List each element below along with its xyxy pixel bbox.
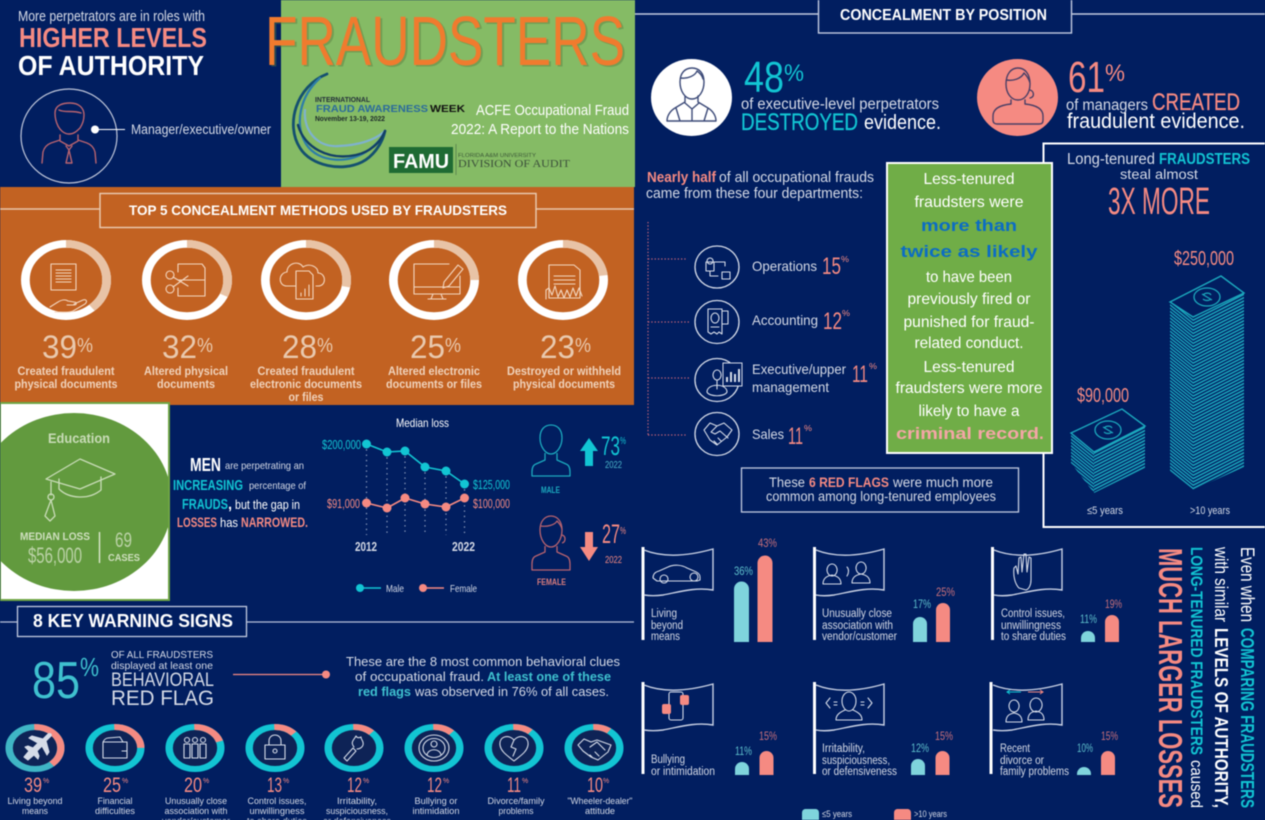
donut: 28% created electronic documents: or files — [288, 392, 324, 404]
chart: large money stack: $250,000 — [1174, 248, 1234, 270]
text block: men are perpetrating: has — [220, 516, 238, 530]
red flag: recent divorce: family problems — [1000, 766, 1069, 778]
heading: top 5 concealment methods — [0, 194, 634, 228]
text: 8 most common behavioral clues: At least one of these — [487, 669, 611, 684]
warning sign: irritability 12%: suspiciousness, — [326, 806, 388, 817]
callout: less-tenured fraudsters: to have been — [926, 269, 1012, 286]
warning sign: close association 20%: Unusually close — [165, 796, 227, 807]
donut: 39% created physical documents: % — [77, 335, 93, 357]
text: nearly half of all occupational frauds: of all occupational frauds — [719, 170, 874, 186]
department: operations 15%: 15 — [822, 253, 841, 280]
panel: education — [0, 403, 172, 600]
chart legend — [356, 583, 477, 595]
warning sign: irritability 12% — [323, 727, 391, 820]
department: operations 15% — [695, 246, 849, 288]
stat: 61% managers: fraudulent evidence. — [1067, 110, 1245, 133]
department: sales 11%: % — [804, 424, 812, 433]
text block: men are perpetrating: NARROWED. — [241, 514, 308, 530]
red flag: control issues — [992, 547, 1122, 643]
warning sign: divorce or family problems 11%: Divorce/family — [488, 796, 545, 807]
donut: 28% created electronic documents: electronic documents — [250, 379, 362, 391]
callout: less-tenured fraudsters: fraudsters were more — [896, 380, 1043, 397]
icon: manager person in circle — [21, 89, 117, 183]
vertical text: comparing fraudsters — [1152, 546, 1257, 808]
text: nearly half of all occupational frauds: Nearly half — [647, 170, 716, 186]
stat: 48% executive-level: 48 — [744, 53, 784, 102]
bars: 17% vs 25%: 17% — [913, 597, 931, 611]
connector — [233, 670, 330, 678]
stat: 48% executive-level: evidence. — [864, 112, 941, 134]
icon: car — [653, 565, 700, 581]
red flag: irritability: Irritability, — [822, 743, 865, 755]
donut: 39% created physical documents: physical documents — [14, 379, 118, 391]
text: 8 most common behavioral clues: red flags — [358, 684, 411, 699]
stat: female 27%: 2022 — [605, 555, 622, 566]
diagram: departments — [648, 222, 877, 456]
text: 8 most common behavioral clues: of occupational fraud. — [355, 669, 484, 684]
text block: men are perpetrating: INCREASING — [173, 478, 243, 494]
bars: 11% vs 19%: 11% — [1080, 612, 1097, 626]
callout: less-tenured fraudsters: criminal record — [896, 424, 1039, 443]
logo: famu division of audit: FAMU — [393, 151, 449, 173]
text: nearly half of all occupational frauds: came from these four departments: — [646, 186, 863, 202]
department: sales 11% — [695, 412, 812, 456]
callout: less-tenured fraudsters: twice as likely — [900, 242, 1038, 261]
stat: median loss: $56,000 — [28, 543, 82, 568]
logo: fraud awareness week swoosh — [293, 74, 385, 167]
text block: men are perpetrating: FRAUDS — [182, 497, 228, 513]
warning sign: wheeler-dealer 10%: % — [603, 778, 609, 785]
red flag: unusually close association: Unusually close — [822, 608, 892, 620]
chart value labels: $100,000 — [473, 496, 510, 511]
red flag: irritability — [814, 682, 953, 778]
text: more perpetrators intro: More perpetrators are in roles with — [18, 8, 205, 25]
text: 8 most common behavioral clues: These are the 8 most common behavioral clues — [346, 654, 620, 669]
red flag: unusually close association: association with — [822, 620, 893, 632]
red flag: recent divorce — [991, 682, 1118, 778]
warning sign: bullying 12%: % — [443, 778, 449, 785]
warning sign: living beyond means 39%: 39 — [24, 774, 42, 797]
warning sign: financial difficulties 25%: % — [122, 778, 128, 785]
warning sign: close association 20%: % — [203, 778, 209, 785]
panel: long-tenured fraudsters steal 3x more: steal almost — [1120, 166, 1198, 182]
bars: 12% vs 15% — [911, 729, 953, 775]
donut: 25% altered electronic documents: % — [445, 335, 461, 357]
callout: less-tenured fraudsters: related conduct. — [914, 335, 1024, 352]
warning sign: financial difficulties 25% — [89, 727, 141, 817]
text: nearly half of all occupational frauds — [646, 170, 874, 202]
warning sign: irritability 12%: 12 — [347, 774, 362, 797]
department: operations 15%: % — [841, 255, 849, 264]
heading: 8 key warning signs — [0, 606, 634, 636]
logo: famu division of audit: FLORIDA A&M UNIVERSITY — [458, 153, 537, 159]
stat: male 73% — [532, 425, 626, 495]
department: operations 15%: Operations — [752, 258, 817, 274]
warning sign: divorce or family problems 11% — [488, 727, 545, 817]
department: accounting 12%: 12 — [823, 308, 842, 335]
chart value labels: $125,000 — [473, 477, 510, 492]
icon: graduation cap — [45, 459, 115, 521]
text: acfe report: ACFE Occupational Fraud — [476, 102, 629, 119]
icon: executive — [651, 59, 732, 136]
red flag: unusually close association — [814, 547, 955, 643]
title: FRAUDSTERS — [265, 2, 625, 80]
heading: 8 key warning signs: 8 KEY WARNING SIGNS — [33, 611, 233, 631]
text block: men are perpetrating: percentage of — [249, 480, 306, 492]
icon: phone with message bubbles — [662, 692, 689, 720]
bars: 11% vs 19% — [1080, 597, 1122, 642]
warning sign: irritability 12%: Irritability, — [337, 796, 377, 807]
legend: tenure — [802, 809, 947, 820]
warning sign: living beyond means 39%: % — [43, 778, 49, 785]
warning sign: bullying 12%: 12 — [427, 774, 442, 797]
warning sign: wheeler-dealer 10%: attitude — [585, 806, 615, 817]
stat: 85% behavioral red flag: displayed at least one — [111, 660, 213, 672]
stat: 48% executive-level: % — [784, 60, 804, 87]
warning sign: control issues 13%: 13 — [267, 774, 282, 797]
callout: 6 red flags: common among long-tenured employees — [766, 488, 996, 504]
bars: 11% vs 15% — [735, 729, 777, 775]
bars: 10% vs 15%: 10% — [1077, 741, 1093, 755]
donut: 23% destroyed or withheld: Destroyed or withheld — [507, 366, 621, 378]
stat: male 73%: 73 — [601, 431, 620, 461]
stat: 61% managers: CREATED — [1152, 89, 1240, 116]
stat: 85% behavioral red flag: RED FLAG — [111, 687, 214, 710]
icon: irritated person — [826, 692, 872, 720]
logo text: fraud awareness week: FRAUD AWARENESS — [316, 103, 428, 115]
stat: 85% behavioral red flag: % — [80, 652, 99, 682]
callout: less-tenured fraudsters: fraudsters were — [914, 194, 1024, 211]
donut: 32% altered physical documents: Altered physical — [144, 366, 228, 378]
callout: 6 red flags: These — [769, 474, 805, 490]
panel: title and logos — [265, 0, 635, 187]
warning sign: close association 20%: 20 — [184, 774, 202, 797]
stat: 85% behavioral red flag: BEHAVIORAL — [111, 670, 214, 691]
donut: 32% altered physical documents: 32 — [162, 329, 197, 365]
bars: 17% vs 25% — [913, 585, 955, 642]
red flag: unusually close association: vendor/customer — [822, 631, 897, 643]
icon: separated couple — [1006, 690, 1044, 722]
donut: 25% altered electronic documents: Altered electronic — [388, 366, 481, 378]
department: executive/upper management 11%: Executive/upper — [752, 361, 846, 377]
red flag: bullying or intimidation: or intimidation — [651, 766, 715, 778]
text: acfe report — [451, 102, 629, 138]
stat: female 27%: % — [620, 526, 626, 537]
callout: less-tenured fraudsters: previously fired or — [908, 291, 1031, 308]
stat: 85% behavioral red flag: 85 — [32, 652, 80, 710]
donut: 28% created electronic documents — [250, 244, 362, 404]
warning sign: bullying 12% — [408, 727, 460, 817]
stat: female 27%: FEMALE — [537, 577, 566, 587]
callout: manager/executive/owner: Manager/executive/owner — [131, 122, 271, 137]
panel: long-tenured fraudsters steal 3x more: Long-tenured — [1067, 151, 1155, 168]
chart value labels: $200,000 — [322, 437, 361, 452]
chart value labels: 2022 — [452, 540, 475, 554]
chart value labels: 2012 — [355, 540, 377, 554]
bars: 36% vs 43%: 43% — [758, 536, 777, 550]
red flag: irritability: suspiciousness, — [822, 755, 890, 767]
series: male — [362, 440, 469, 488]
stat: 48% executive-level: of executive-level perpetrators — [741, 96, 939, 113]
red flag: bullying or intimidation: Bullying — [651, 754, 685, 766]
text: acfe report: 2022: A Report to the Nations — [451, 121, 629, 138]
stat: 85% behavioral red flag — [32, 649, 214, 710]
donut: 23% destroyed or withheld: 23 — [540, 329, 575, 365]
donut: 32% altered physical documents: % — [197, 335, 213, 357]
stat: median loss: MEDIAN LOSS — [20, 531, 90, 543]
stat: 61% managers: % — [1105, 60, 1125, 87]
callout: 6 red flags: 6 RED FLAGS — [809, 474, 889, 490]
warning sign: living beyond means 39%: Living beyond — [8, 796, 62, 807]
panel: top 5 concealment methods — [0, 187, 634, 405]
warning sign: financial difficulties 25%: difficulties — [95, 806, 135, 817]
stat: 69 cases — [108, 529, 140, 564]
warning sign: divorce or family problems 11%: 11 — [507, 774, 521, 797]
warning sign: bullying 12%: intimidation — [412, 806, 460, 817]
warning sign: living beyond means 39% — [8, 727, 62, 817]
callout: less-tenured fraudsters: likely to have a — [918, 403, 1020, 420]
heading: top 5 concealment methods: TOP 5 CONCEALMENT METHODS USED BY FRAUDSTERS — [129, 202, 507, 218]
heading: of authority: OF AUTHORITY — [18, 50, 204, 81]
text block: men are perpetrating: LOSSES — [177, 514, 217, 530]
callout: less-tenured fraudsters: Less-tenured — [924, 359, 1014, 376]
red flag: living beyond means — [643, 536, 777, 643]
bars: 36% vs 43%: 36% — [734, 564, 753, 578]
stat: 69 cases: 69 — [115, 529, 132, 552]
logo: famu division of audit — [389, 144, 570, 175]
stat: 85% behavioral red flag: OF ALL FRAUDSTERS — [111, 649, 213, 661]
bars: 36% vs 43% — [734, 536, 777, 642]
red flag: recent divorce: divorce or — [1000, 755, 1044, 767]
callout: 6 red flags — [742, 468, 1018, 512]
icon: two people talking — [823, 562, 870, 584]
donut: 23% destroyed or withheld: physical documents — [513, 379, 615, 391]
text block: men are perpetrating: , — [228, 497, 232, 513]
text block: men are perpetrating: are perpetrating an — [225, 460, 304, 472]
vertical text: comparing fraudsters: caused — [1187, 760, 1206, 808]
donut: 25% altered electronic documents: documents or files — [386, 379, 482, 391]
donut: 23% destroyed or withheld: % — [575, 335, 591, 357]
donut: 39% created physical documents: Created fraudulent — [18, 366, 115, 378]
text: 8 most common behavioral clues: was observed in 76% of all cases. — [414, 684, 609, 699]
warning sign: financial difficulties 25%: 25 — [103, 774, 121, 797]
donut: 32% altered physical documents — [144, 244, 228, 391]
logo: famu division of audit: DIVISION OF AUDIT — [458, 158, 570, 170]
warning sign: close association 20% — [162, 727, 230, 820]
series: female — [362, 494, 469, 512]
legend: tenure: ≤5 years — [822, 809, 852, 820]
donut: 28% created electronic documents: 28 — [282, 329, 317, 365]
stat: female 27% — [532, 516, 626, 587]
logo text: fraud awareness week: INTERNATIONAL — [315, 97, 371, 104]
warning sign: financial difficulties 25%: Financial — [98, 796, 132, 807]
donut: 23% destroyed or withheld — [507, 244, 621, 391]
red flag: living beyond means: beyond — [651, 620, 683, 632]
callout: less-tenured fraudsters: punished for fraud- — [904, 314, 1034, 331]
bars: 11% vs 15%: 15% — [759, 729, 777, 743]
department: executive/upper management 11%: 11 — [852, 361, 868, 388]
donut: 39% created physical documents: 39 — [42, 329, 77, 365]
warning sign: control issues 13%: unwillingness — [250, 806, 305, 817]
logo text: fraud awareness week — [315, 97, 465, 123]
stat: male 73%: % — [620, 436, 626, 447]
icon: raised hand — [1014, 554, 1031, 590]
callout: less-tenured fraudsters: . — [1039, 424, 1044, 443]
warning sign: control issues 13%: Control issues, — [248, 796, 306, 807]
department: sales 11%: 11 — [788, 423, 803, 450]
warning sign: bullying 12%: Bullying or — [414, 796, 458, 807]
red flag: control issues: unwillingness — [1001, 620, 1061, 632]
stat: 48% executive-level — [651, 53, 941, 136]
callout: less-tenured fraudsters: Less-tenured — [924, 171, 1014, 188]
stat: female 27%: 27 — [602, 519, 620, 549]
bars: 12% vs 15%: 12% — [911, 741, 929, 755]
warning sign: wheeler-dealer 10%: "Wheeler-dealer" — [568, 796, 632, 807]
bars: 10% vs 15% — [1077, 729, 1118, 775]
text block: men are perpetrating: but the gap in — [235, 498, 300, 512]
panel: long-tenured fraudsters steal 3x more — [1044, 144, 1265, 527]
bars: 12% vs 15%: 15% — [935, 729, 953, 743]
chart: small money stack — [1071, 385, 1145, 517]
stat: 61% managers: of managers — [1066, 97, 1148, 114]
bars: 11% vs 15%: 11% — [735, 744, 752, 758]
chart legend: Female — [450, 583, 477, 595]
chart value labels: $91,000 — [327, 496, 360, 511]
stat: median loss — [20, 531, 90, 568]
stat: male 73%: 2022 — [605, 460, 622, 471]
callout: less-tenured fraudsters — [887, 163, 1052, 453]
donut: 25% altered electronic documents — [386, 244, 482, 391]
heading: concealment by position: CONCEALMENT BY POSITION — [840, 7, 1047, 24]
chart value labels — [322, 437, 510, 554]
red flag: control issues: to share duties — [1001, 631, 1066, 643]
text: 8 most common behavioral clues — [346, 654, 620, 699]
red flag: irritability: or defensiveness — [822, 766, 897, 778]
warning sign: wheeler-dealer 10%: 10 — [587, 774, 603, 797]
red flag: control issues: Control issues, — [1001, 608, 1065, 620]
icon: manager — [977, 59, 1058, 136]
text block: men are perpetrating — [173, 455, 308, 530]
warning sign: irritability 12%: % — [363, 778, 369, 785]
department: executive/upper management 11% — [695, 358, 877, 402]
department: accounting 12%: % — [842, 309, 850, 318]
bars: 10% vs 15%: 15% — [1101, 729, 1118, 743]
text block: men are perpetrating: MEN — [190, 455, 221, 475]
title: FRAUDSTERS — [267, 4, 627, 82]
logo text: fraud awareness week: WEEK — [430, 103, 465, 115]
logo text: fraud awareness week: November 13-19, 2022 — [315, 116, 385, 123]
bars: 17% vs 25%: 25% — [936, 585, 955, 599]
callout: less-tenured fraudsters: more than — [921, 216, 1017, 235]
donut: 28% created electronic documents: % — [317, 335, 333, 357]
bars: 11% vs 19%: 19% — [1105, 597, 1122, 611]
vertical text: comparing fraudsters: Even when — [1236, 547, 1257, 622]
stat: male 73%: MALE — [541, 485, 560, 495]
red flag: living beyond means: Living — [651, 608, 677, 620]
donut: 28% created electronic documents: Created fraudulent — [258, 366, 355, 378]
stat: 61% managers — [977, 53, 1245, 136]
department: executive/upper management 11%: management — [752, 379, 829, 395]
line chart: median loss — [322, 416, 510, 595]
department: accounting 12%: Accounting — [752, 312, 818, 328]
warning sign: divorce or family problems 11%: % — [522, 778, 528, 785]
callout: 6 red flags: were much more — [892, 474, 993, 490]
vertical text: comparing fraudsters: LONG-TENURED FRAUDSTERS — [1187, 547, 1206, 755]
chart legend: Male — [386, 583, 404, 595]
donut: 25% altered electronic documents: 25 — [410, 329, 445, 365]
panel: higher levels of authority — [0, 0, 281, 187]
stat: 61% managers: 61 — [1068, 53, 1105, 102]
stat: 69 cases: CASES — [108, 553, 140, 564]
chart: large money stack: >10 years — [1190, 505, 1230, 517]
red flag: recent divorce: Recent — [1000, 743, 1031, 755]
label: education: Education — [48, 430, 110, 446]
warning sign: control issues 13%: % — [283, 778, 289, 785]
warning sign: close association 20%: association with — [164, 806, 228, 817]
legend: tenure: >10 years — [914, 809, 947, 820]
warning sign: control issues 13% — [247, 727, 307, 820]
donut: 32% altered physical documents: documents — [157, 379, 215, 391]
chart: small money stack: $90,000 — [1077, 385, 1129, 407]
stat: 48% executive-level: DESTROYED — [741, 109, 858, 136]
chart title: Median loss — [396, 416, 449, 430]
vertical text: comparing fraudsters: with similar — [1211, 546, 1231, 622]
panel: long-tenured fraudsters steal 3x more: FRAUDSTERS — [1159, 151, 1250, 168]
heading: concealment by position — [635, 0, 1265, 33]
department: accounting 12% — [695, 300, 850, 344]
red flag: bullying or intimidation — [643, 682, 777, 778]
chart: small money stack: ≤5 years — [1087, 505, 1123, 517]
red flag: living beyond means: means — [651, 631, 680, 643]
donut: 39% created physical documents — [14, 244, 118, 391]
department: sales 11%: Sales — [752, 426, 784, 442]
warning sign: living beyond means 39%: means — [22, 806, 48, 817]
heading: higher levels: HIGHER LEVELS — [19, 22, 207, 53]
warning sign: wheeler-dealer 10% — [568, 727, 632, 817]
department: executive/upper management 11%: % — [869, 362, 877, 371]
warning sign: divorce or family problems 11%: problems — [498, 806, 534, 817]
chart: large money stack — [1170, 248, 1244, 517]
